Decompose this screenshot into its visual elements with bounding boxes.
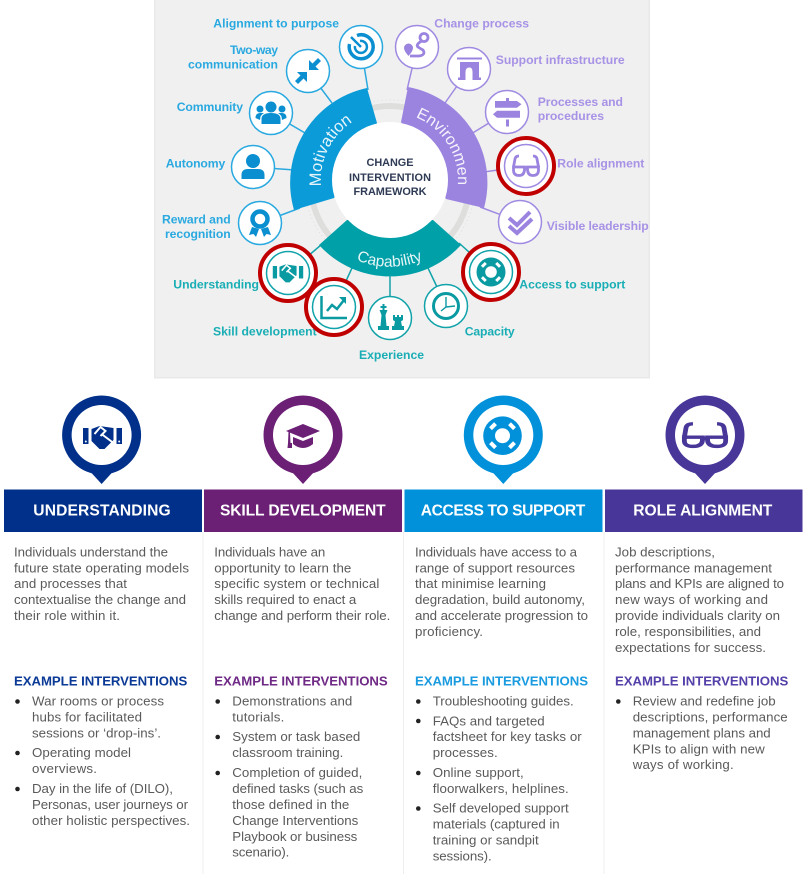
segment: motivation [290, 88, 377, 210]
heading: example interventions: EXAMPLE INTERVENTIONS [14, 674, 188, 689]
node: two-way communication: communication [188, 58, 278, 72]
banner: role alignment: ROLE ALIGNMENT [633, 503, 773, 520]
node: community [177, 92, 292, 134]
text: understanding description: their role within it. [14, 608, 120, 623]
list: understanding interventions: other holistic perspectives. [32, 813, 190, 828]
text: role alignment description: performance management [615, 560, 772, 575]
node: capacity [424, 284, 515, 339]
icon: understanding pin [62, 396, 141, 484]
text: access to support description: range of support resources [415, 560, 575, 575]
node: processes and procedures: procedures [538, 109, 604, 123]
list: skill development interventions: tutorials. [232, 710, 284, 725]
node: experience [359, 296, 424, 362]
node: two-way communication [188, 43, 330, 92]
list: skill development interventions: Demonstrations and [232, 694, 352, 709]
list: understanding interventions [15, 694, 190, 828]
column: understanding [4, 396, 202, 828]
list: access to support interventions: training or sandpit [433, 832, 539, 848]
text: role alignment description: expectations for success. [615, 640, 766, 655]
list: access to support interventions: FAQs and targeted [433, 713, 545, 728]
icon: glasses pin [666, 396, 744, 484]
heading: example interventions: EXAMPLE INTERVENTIONS [415, 674, 588, 689]
node: autonomy: Autonomy [166, 157, 226, 171]
text: skill development description [214, 544, 390, 623]
list: role alignment interventions [616, 694, 788, 772]
list: role alignment interventions: Review and redefine job [633, 694, 776, 709]
list: understanding interventions: Operating model [32, 745, 131, 760]
list: role alignment interventions: management plans and [633, 725, 771, 740]
text: skill development description: change and perform their role. [214, 608, 390, 623]
list: role alignment interventions: ways of working. [632, 757, 734, 772]
text: skill development description: skills required to enact a [214, 592, 357, 607]
centre hub: CHANGE [366, 157, 414, 169]
column: role alignment [605, 396, 802, 772]
banner: understanding [4, 490, 202, 532]
text: understanding description: future state operating models [14, 560, 189, 575]
node: alignment to purpose: Alignment to purpose [213, 16, 339, 30]
list: skill development interventions: scenario). [232, 844, 289, 860]
banner: access to support [404, 490, 602, 532]
text: access to support description: and accelerate progression to [415, 608, 588, 623]
node: skill development, highlighted: Skill development [213, 325, 317, 339]
list: skill development interventions: those defined in the [232, 797, 349, 812]
list: access to support interventions: processes. [433, 745, 498, 760]
node: skill development, highlighted [213, 279, 362, 339]
list: access to support interventions: Self developed support [433, 801, 569, 816]
list: understanding interventions: Personas, user journeys or [32, 797, 189, 812]
list: access to support interventions: Online support, [433, 765, 524, 780]
list: access to support interventions: materials (captured in [433, 817, 560, 832]
node: understanding, highlighted: Understanding [173, 277, 259, 291]
centre hub [332, 122, 448, 238]
text: access to support description: proficiency. [415, 624, 483, 639]
node: processes and procedures [486, 90, 623, 134]
list: role alignment interventions: descriptions, performance [633, 710, 788, 725]
segment: capability [319, 220, 461, 276]
banner: access to support: ACCESS TO SUPPORT [421, 503, 586, 520]
banner: skill development: SKILL DEVELOPMENT [220, 503, 386, 520]
icon: lifebuoy pin [464, 396, 543, 484]
node: two-way communication: Two-way [230, 43, 278, 57]
segment: motivation: Motivation [310, 116, 352, 185]
list: understanding interventions: War rooms or process [32, 694, 164, 709]
node: visible leadership [498, 200, 649, 244]
node: change process: Change process [434, 16, 529, 30]
text: access to support description [415, 544, 588, 639]
text: role alignment description [615, 544, 784, 655]
text: role alignment description: plans and KPIs are aligned to [615, 576, 784, 591]
list: skill development interventions: Change Interventions [232, 813, 359, 828]
list: access to support interventions: factsheet for key tasks or [433, 729, 582, 744]
text: role alignment description: role, responsibilities, and [615, 624, 761, 639]
node: role alignment, highlighted: Role alignment [557, 157, 644, 171]
list: skill development interventions: Playbook or business [232, 829, 358, 844]
list: understanding interventions: Day in the life of (DILO), [32, 781, 173, 796]
list: understanding interventions: hubs for facilitated [32, 710, 142, 725]
text: understanding description [14, 544, 189, 623]
node: processes and procedures: Processes and [538, 95, 623, 109]
list: skill development interventions [215, 694, 364, 860]
column: access to support [404, 396, 602, 863]
text: skill development description: specific system or technical [214, 576, 379, 591]
node: autonomy [166, 146, 274, 188]
node: reward and recognition: recognition [165, 227, 231, 241]
node: role alignment, highlighted [498, 138, 644, 194]
column: skill development [204, 396, 402, 860]
heading: example interventions: EXAMPLE INTERVENTIONS [214, 674, 388, 689]
icon: graduation cap pin [264, 396, 342, 484]
node: support infrastructure [448, 48, 625, 90]
node: experience: Experience [359, 348, 424, 362]
banner: understanding: UNDERSTANDING [33, 503, 171, 520]
list: access to support interventions: sessions). [433, 848, 492, 863]
list: skill development interventions: Completion of guided, [232, 765, 362, 780]
list: skill development interventions: System or task based [232, 729, 360, 744]
list: access to support interventions [416, 694, 582, 863]
text: understanding description: Individuals understand the [14, 544, 168, 560]
node: access to support, highlighted [463, 244, 625, 300]
node: visible leadership: Visible leadership [547, 219, 649, 233]
list: access to support interventions: floorwalkers, helplines. [433, 781, 569, 796]
node: change process [396, 16, 529, 68]
text: access to support description: Individuals have access to a [415, 544, 578, 560]
node: reward and recognition [162, 202, 282, 244]
list: understanding interventions: sessions or ‘drop-ins’. [32, 725, 161, 740]
node: reward and recognition: Reward and [162, 212, 231, 226]
heading: example interventions: EXAMPLE INTERVENTIONS [615, 674, 789, 689]
list: skill development interventions: defined tasks (such as [232, 781, 364, 796]
node: access to support, highlighted: Access to support [519, 277, 625, 291]
banner: role alignment [605, 490, 802, 532]
text: role alignment description: new ways of working and [615, 592, 768, 607]
node: alignment to purpose [213, 16, 382, 68]
node: understanding, highlighted [173, 245, 316, 301]
list: access to support interventions: Troubleshooting guides. [433, 694, 574, 709]
segment: capability: Capability [358, 252, 420, 270]
node: community: Community [177, 100, 243, 114]
node: capacity: Capacity [465, 325, 515, 339]
text: access to support description: that minimise learning [415, 576, 546, 591]
text: role alignment description: provide individuals clarity on [615, 608, 780, 623]
list: understanding interventions: overviews. [32, 761, 97, 776]
text: access to support description: degradation, build autonomy, [415, 592, 585, 607]
segment: environment [401, 87, 488, 208]
text: understanding description: and processes that [14, 576, 127, 591]
text: understanding description: contextualise the change and [14, 592, 186, 607]
list: role alignment interventions: KPIs to align with new [633, 741, 765, 756]
panel: change intervention framework wheel [154, 0, 650, 378]
banner: skill development [204, 490, 402, 532]
centre hub: FRAMEWORK [354, 186, 427, 198]
text: skill development description: Individuals have an [214, 544, 325, 560]
text: skill development description: opportunity to learn the [214, 560, 351, 575]
centre hub: INTERVENTION [349, 172, 431, 184]
text: role alignment description: Job descriptions, [615, 544, 715, 560]
node: support infrastructure: Support infrastructure [496, 53, 625, 67]
list: skill development interventions: classroom training. [232, 745, 343, 760]
